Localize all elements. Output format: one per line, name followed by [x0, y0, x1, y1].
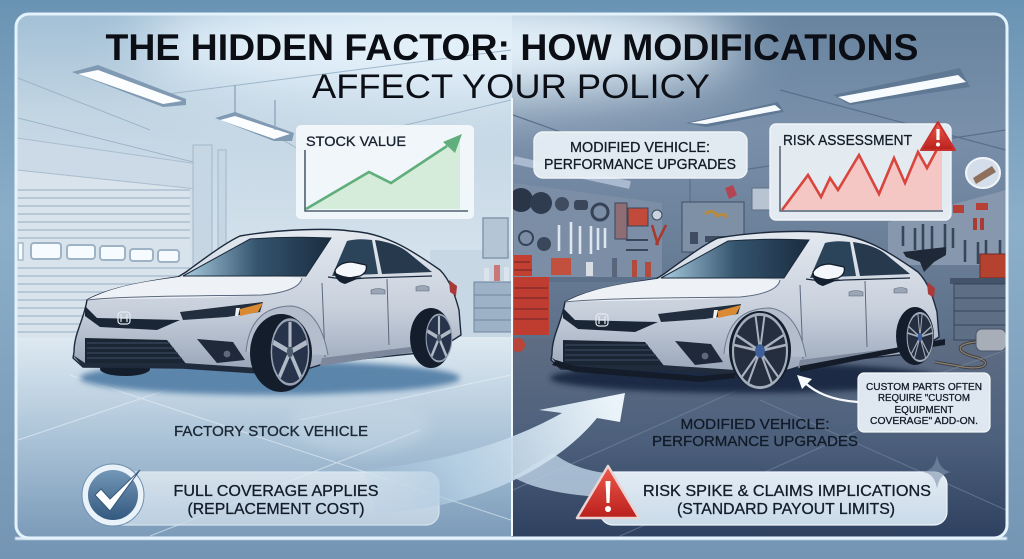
pill: risk spike: (STANDARD PAYOUT LIMITS)	[677, 501, 895, 518]
workbench right	[950, 278, 1006, 340]
tool chest	[474, 265, 512, 332]
back wall tool board	[682, 185, 770, 252]
bottom frame line	[15, 537, 1007, 540]
sparkle	[923, 455, 951, 489]
chart area	[306, 136, 460, 209]
chart card: stock value: STOCK VALUE	[306, 133, 406, 149]
muffler and hose	[935, 329, 1006, 368]
part badge	[966, 158, 1000, 188]
garage door	[17, 138, 226, 338]
spoiler	[903, 247, 946, 272]
title: AFFECT YOUR POLICY	[312, 68, 710, 106]
chart card: risk assessment: RISK ASSESSMENT	[783, 133, 912, 149]
pill: full coverage: FULL COVERAGE APPLIES	[174, 483, 378, 500]
title	[106, 27, 918, 106]
callout: custom parts: EQUIPMENT	[894, 404, 954, 416]
heading box: modified vehicle: PERFORMANCE UPGRADES	[544, 157, 736, 173]
icon: check badge	[82, 464, 144, 526]
pill: risk spike: RISK SPIKE & CLAIMS IMPLICATIONS	[643, 483, 931, 500]
panel: factory stock garage	[18, 16, 512, 536]
label: modified vehicle: MODIFIED VEHICLE:	[680, 417, 830, 433]
callout: custom parts: COVERAGE" ADD-ON.	[870, 415, 978, 427]
arrow: callout pointer	[797, 375, 858, 402]
pegboard and tools right	[888, 190, 1006, 278]
label: modified vehicle: PERFORMANCE UPGRADES	[652, 434, 858, 450]
workbench	[549, 277, 664, 282]
chart card: risk assessment	[770, 122, 955, 220]
icon: large warning	[577, 466, 639, 518]
pegboard and tools left	[509, 183, 666, 278]
callout: custom parts: REQUIRE "CUSTOM	[878, 392, 970, 404]
divider	[511, 98, 513, 536]
title: THE HIDDEN FACTOR: HOW MODIFICATIONS	[106, 27, 918, 68]
label: modified vehicle	[652, 417, 858, 450]
ceiling lights	[686, 68, 970, 127]
pill: full coverage	[110, 393, 625, 525]
heading box: modified vehicle: MODIFIED VEHICLE:	[570, 140, 710, 156]
heading box: modified vehicle	[534, 132, 747, 178]
arrow: lower band to risk pill	[513, 453, 615, 497]
red tool chest	[511, 255, 549, 352]
pipe	[514, 160, 630, 185]
panel: modified garage	[512, 16, 1006, 536]
car: factory stock	[73, 229, 461, 392]
pill: risk spike	[600, 472, 947, 525]
label: factory stock vehicle: FACTORY STOCK VEHICLE	[174, 424, 368, 440]
icon: warning	[921, 122, 955, 150]
chart area	[782, 140, 942, 210]
chart card: stock value	[296, 125, 474, 219]
pill: full coverage: (REPLACEMENT COST)	[188, 501, 364, 518]
ceiling lights	[72, 65, 294, 141]
callout: custom parts	[858, 373, 990, 432]
arrow: coverage to modified	[364, 393, 625, 513]
front splitter	[552, 360, 735, 382]
car: modified	[551, 231, 946, 389]
callout: custom parts: CUSTOM PARTS OFTEN	[866, 381, 982, 393]
wall cabinet	[483, 218, 508, 258]
